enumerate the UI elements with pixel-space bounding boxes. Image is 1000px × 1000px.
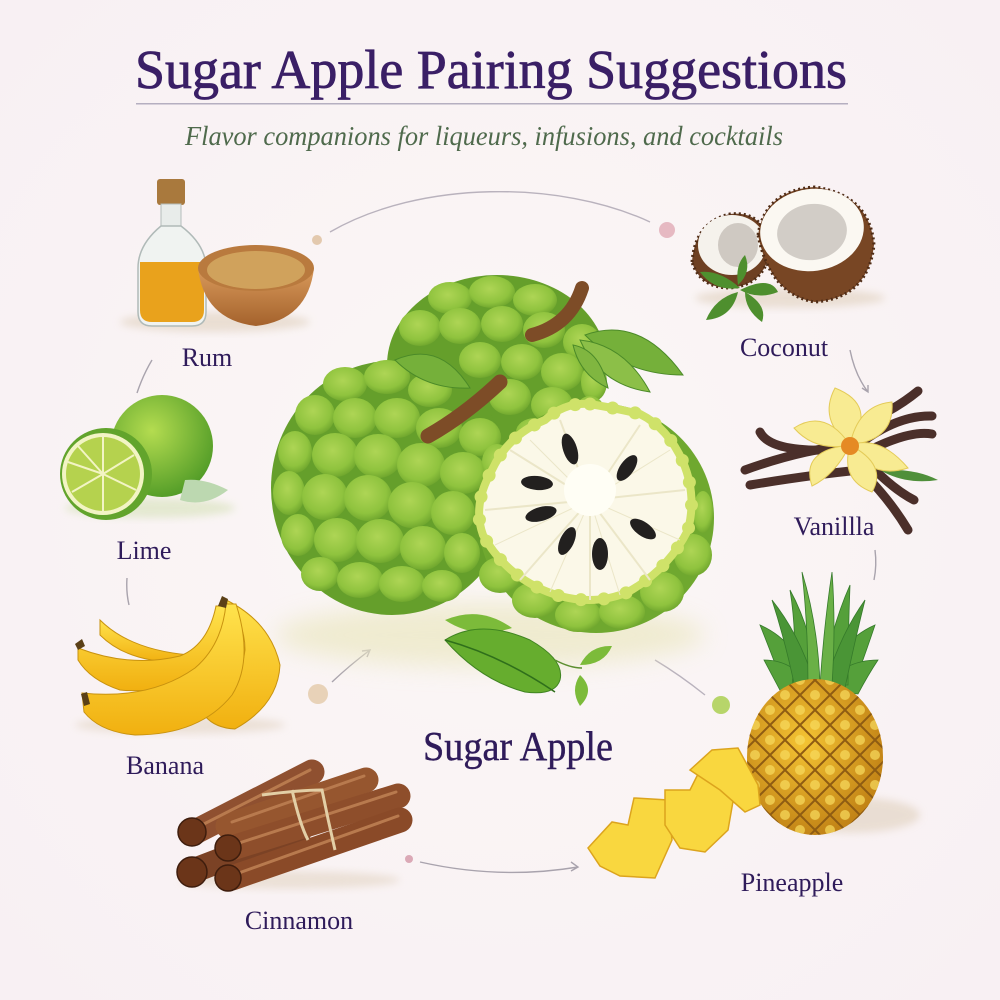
label: pineapple: Pineapple (741, 868, 843, 897)
leaves (395, 330, 683, 392)
front fruit (271, 360, 513, 615)
label: sugar apple: Sugar Apple (423, 723, 613, 769)
connector: sugar apple to pineapple (655, 660, 730, 714)
seeds (520, 432, 659, 570)
label: banana: Banana (126, 751, 204, 780)
connector: lime to banana (127, 578, 129, 605)
icon: pineapple with chunks (588, 572, 920, 878)
connector: vanilla to pineapple (874, 550, 876, 580)
icon: cinnamon sticks (177, 770, 400, 891)
stems (428, 288, 582, 436)
connector: banana to sugar apple (308, 650, 370, 704)
icon: vanilla pods and flower (745, 388, 938, 530)
icon: coconut halves (692, 182, 885, 322)
label: rum: Rum (182, 343, 232, 372)
illustration: sugar apple group (271, 275, 714, 706)
back fruit (387, 275, 607, 455)
connector: rum to coconut (312, 192, 675, 245)
label: vanilla: Vanillla (794, 512, 875, 541)
connector: coconut to vanilla (850, 350, 868, 392)
title: Sugar Apple Pairing Suggestions (135, 39, 847, 100)
icon: lime (60, 395, 235, 520)
label: cinnamon: Cinnamon (245, 906, 353, 935)
connector: cinnamon to pineapple (405, 855, 578, 872)
label: coconut: Coconut (740, 333, 829, 362)
foreground leaves (445, 614, 612, 706)
icon: bananas (75, 596, 285, 735)
connector: rum to lime (137, 360, 152, 393)
subtitle: Flavor companions for liqueurs, infusions, and cocktails (184, 121, 783, 151)
label: lime: Lime (117, 536, 171, 565)
icon: rum bottle and sugar bowl (120, 179, 314, 332)
cut fruit (478, 403, 714, 633)
